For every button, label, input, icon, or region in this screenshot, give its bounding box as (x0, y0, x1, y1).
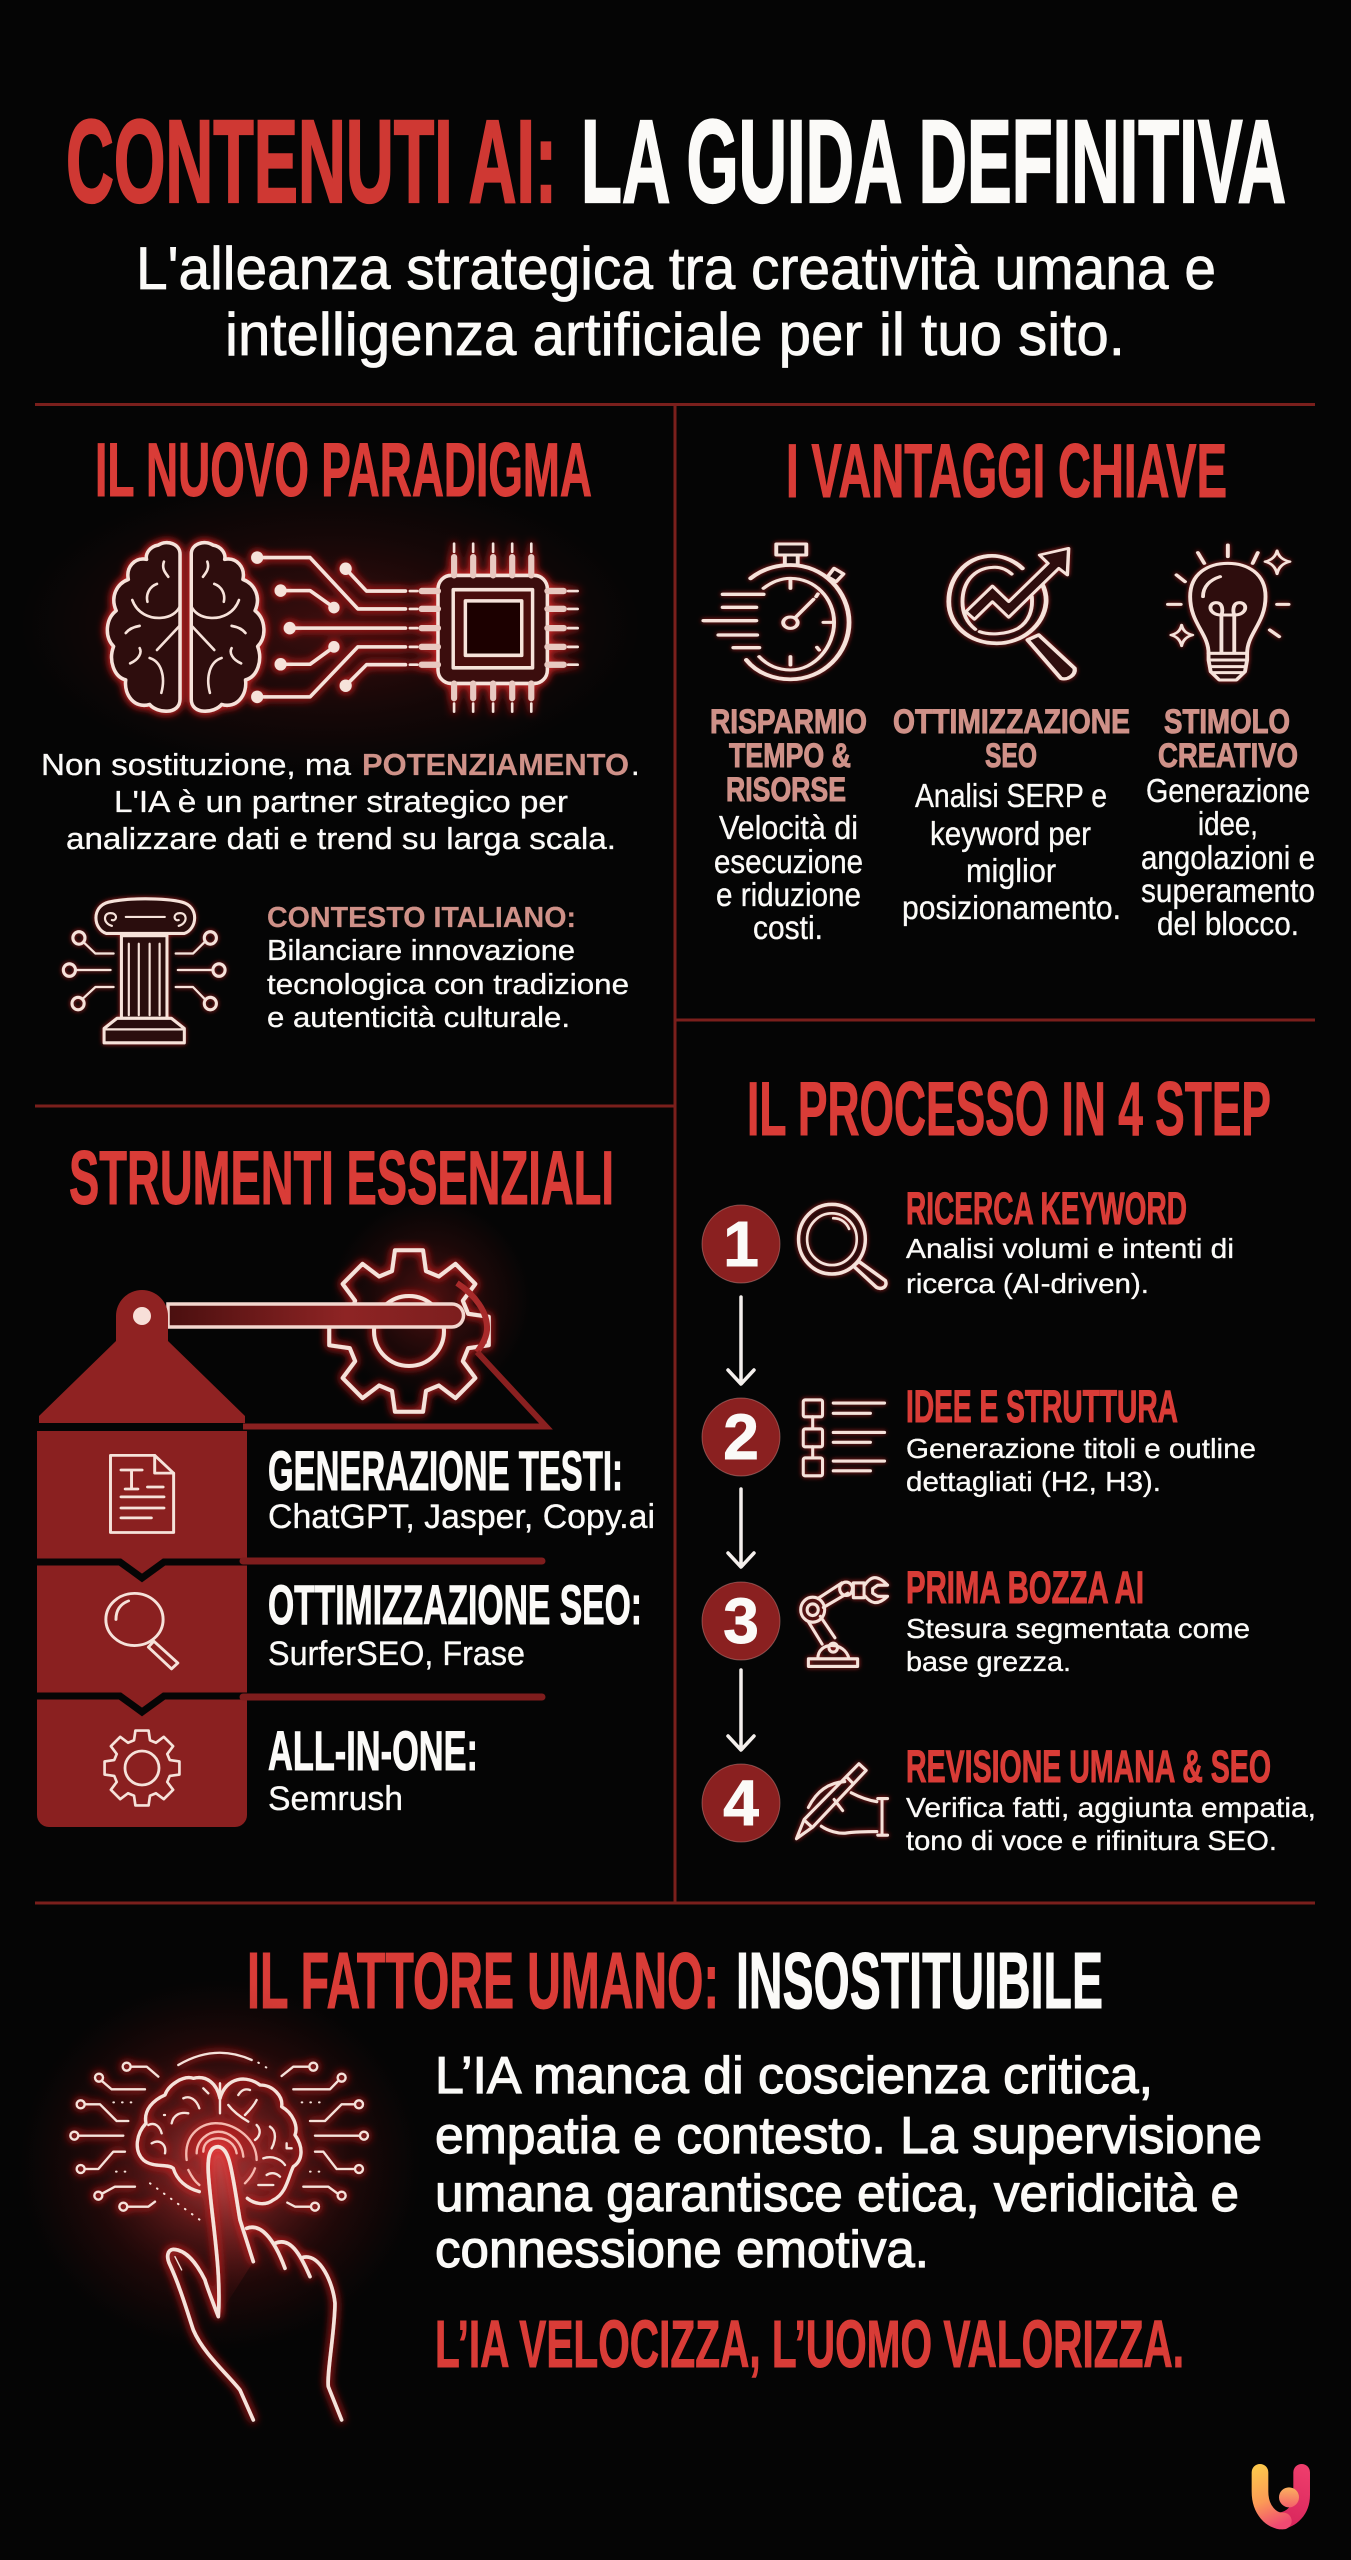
text: contesto italiano: CONTESTO ITALIANO: (267, 902, 576, 934)
tool: all-in-one: ALL-IN-ONE: (268, 1719, 478, 1782)
arrow 3 to 4 (728, 1670, 754, 1750)
description: miglior (966, 852, 1056, 889)
tool: ottimizzazione seo: SurferSEO, Frase (268, 1635, 525, 1673)
description: Velocità di (719, 809, 858, 846)
benefit: risparmio tempo e risorse (704, 544, 867, 946)
icon: writing hand (796, 1764, 888, 1839)
description: superamento (1141, 872, 1315, 909)
number 4: 4 (723, 1767, 759, 1839)
text: contesto italiano: Bilanciare innovazione (267, 935, 575, 967)
arrow 1 to 2 (728, 1297, 754, 1384)
text: paragraph (435, 2047, 1262, 2279)
funnel: stacked red tool column (37, 1283, 546, 1827)
heading: il fattore umano insostituibile: INSOSTITUIBILE (736, 1936, 1103, 2025)
panel: il nuovo paradigma (20, 428, 640, 1043)
icon: outline list (803, 1400, 885, 1476)
heading: il nuovo paradigma: IL NUOVO PARADIGMA (95, 428, 592, 513)
subtitle: L'alleanza strategica tra creatività umana e (136, 235, 1216, 302)
step text (906, 1562, 1250, 1677)
description (1141, 772, 1315, 942)
icon: magnifier (106, 1593, 178, 1669)
description (714, 809, 863, 946)
icon: light bulb (1168, 545, 1290, 680)
number 3: 3 (723, 1585, 759, 1657)
label: stimolo creativo: CREATIVO (1158, 737, 1298, 775)
arrow 2 to 3 (728, 1489, 754, 1567)
tool: generazione testi: ChatGPT, Jasper, Copy.ai (268, 1498, 655, 1536)
step 1 (702, 1183, 1234, 1299)
subtitle (136, 235, 1216, 368)
step text: Stesura segmentata come (906, 1613, 1250, 1644)
description (902, 777, 1121, 926)
description: posizionamento. (902, 889, 1121, 926)
roof shape (39, 1290, 245, 1423)
panel: i vantaggi chiave (704, 429, 1315, 946)
description: esecuzione (714, 843, 863, 880)
step 4 (702, 1741, 1316, 1856)
number 1 (702, 1205, 780, 1283)
panel: il fattore umano (20, 1936, 1262, 2420)
block body (37, 1431, 247, 1827)
label: risparmio tempo & risorse (710, 703, 867, 809)
icon: robot arm (801, 1578, 888, 1666)
benefit: ottimizzazione seo (893, 548, 1130, 926)
icon: finger touching brain (20, 1980, 420, 2420)
heading: il fattore umano insostituibile: IL FATTORE UMANO: (247, 1936, 719, 2025)
step text: PRIMA BOZZA AI (906, 1562, 1144, 1613)
label: ottimizzazione seo (893, 703, 1130, 775)
text: paragraph: L’IA manca di coscienza critica, (435, 2047, 1153, 2105)
icon: glowing gear (329, 1200, 530, 1412)
icon: brain connected to chip (20, 475, 640, 775)
icon: small gear (105, 1731, 179, 1805)
text: contesto italiano (267, 902, 629, 1034)
step text: RICERCA KEYWORD (906, 1183, 1187, 1234)
logo (1260, 2472, 1302, 2521)
text: contesto italiano: e autenticità culturale. (267, 1002, 570, 1034)
text: potenziamento paragraph: L'IA è un partner strategico per (114, 784, 568, 819)
benefit: stimolo creativo (1141, 545, 1315, 942)
step text: Generazione titoli e outline (906, 1433, 1256, 1464)
icon: ionic column with circuits (63, 899, 225, 1043)
number 1: 1 (723, 1208, 759, 1280)
tool: generazione testi (268, 1439, 655, 1536)
text: potenziamento paragraph: . (631, 747, 640, 782)
label: stimolo creativo: STIMOLO (1164, 703, 1290, 741)
label: risparmio tempo & risorse: TEMPO & (729, 737, 851, 775)
tool: all-in-one: Semrush (268, 1780, 403, 1818)
step 3 (702, 1562, 1250, 1677)
icon: stopwatch (704, 544, 849, 679)
icon: document (110, 1455, 174, 1532)
text: potenziamento paragraph (41, 747, 640, 856)
step text: Verifica fatti, aggiunta empatia, (906, 1792, 1316, 1823)
text: potenziamento paragraph: analizzare dati e trend su larga scala. (66, 821, 616, 856)
panel: il processo in 4 step (702, 1067, 1316, 1856)
panel: strumenti essenziali (37, 1136, 655, 1827)
description: e riduzione (716, 876, 861, 913)
step text: Analisi volumi e intenti di (906, 1233, 1234, 1264)
text: potenziamento paragraph: POTENZIAMENTO (362, 747, 629, 782)
icon: magnifier with growth arrow (949, 548, 1075, 679)
description: angolazioni e (1141, 839, 1315, 876)
subtitle: intelligenza artificiale per il tuo sito. (225, 301, 1125, 368)
tool: ottimizzazione seo (268, 1573, 642, 1673)
label: risparmio tempo & risorse: RISPARMIO (710, 703, 867, 741)
step text: tono di voce e rifinitura SEO. (906, 1825, 1277, 1856)
description: costi. (753, 909, 823, 946)
step 2 (702, 1381, 1256, 1497)
label: ottimizzazione seo: SEO (985, 737, 1037, 775)
number 2: 2 (723, 1401, 759, 1473)
tool: generazione testi: GENERAZIONE TESTI: (268, 1439, 623, 1502)
number 4 (702, 1764, 780, 1842)
step text (906, 1741, 1316, 1856)
title: CONTENUTI AI: (66, 96, 557, 228)
step text: dettagliati (H2, H3). (906, 1466, 1161, 1497)
step text (906, 1381, 1256, 1497)
label: risparmio tempo & risorse: RISORSE (726, 771, 846, 809)
text: paragraph: connessione emotiva. (435, 2221, 929, 2279)
step text: ricerca (AI-driven). (906, 1268, 1149, 1299)
text: paragraph: empatia e contesto. La supervisione (435, 2107, 1262, 2165)
icon: magnifier (799, 1204, 886, 1288)
arm with pivot (168, 1283, 546, 1426)
heading: strumenti essenziali: STRUMENTI ESSENZIALI (69, 1136, 614, 1221)
step text (906, 1183, 1234, 1299)
number 3 (702, 1582, 780, 1660)
text: potenziamento paragraph: Non sostituzione, ma (41, 747, 352, 782)
step text: IDEE E STRUTTURA (906, 1381, 1178, 1432)
description: Generazione (1146, 772, 1310, 809)
description: idee, (1198, 805, 1258, 842)
description: del blocco. (1157, 905, 1299, 942)
tool: all-in-one (268, 1719, 478, 1818)
text: paragraph: umana garantisce etica, veridicità e (435, 2165, 1239, 2223)
step text: base grezza. (906, 1646, 1071, 1677)
text: contesto italiano: tecnologica con tradizione (267, 969, 629, 1001)
description: keyword per (930, 815, 1091, 852)
label: ottimizzazione seo: OTTIMIZZAZIONE (893, 703, 1130, 741)
tool: ottimizzazione seo: OTTIMIZZAZIONE SEO: (268, 1573, 642, 1636)
label: stimolo creativo (1158, 703, 1298, 775)
number 2 (702, 1398, 780, 1476)
description: Analisi SERP e (915, 777, 1107, 814)
